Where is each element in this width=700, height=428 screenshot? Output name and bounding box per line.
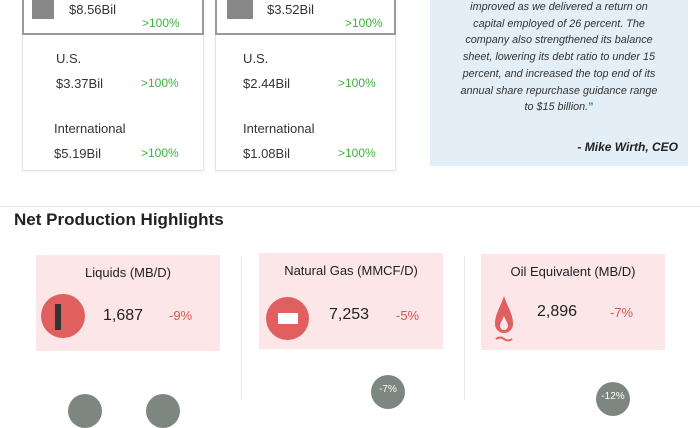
card header: downstream total [215, 0, 396, 35]
card header: upstream total: >100% [142, 16, 180, 30]
text: U.S. downstream: $2.44Bil [243, 76, 290, 91]
panel: natural gas: -5% [396, 308, 419, 323]
icon: flame drop [495, 296, 513, 342]
text: international downstream: International [243, 121, 315, 136]
text: U.S. upstream [56, 51, 179, 91]
text: international downstream: >100% [338, 146, 376, 160]
text: international upstream: International [54, 121, 126, 136]
quote text: to $15 billion.” [524, 101, 594, 113]
attribution: - Mike Wirth, CEO [577, 140, 678, 154]
badge: -7% [371, 375, 405, 409]
icon: pump jack [41, 294, 85, 338]
quote text [460, 1, 657, 113]
panel: liquids: -9% [169, 308, 192, 323]
card header: upstream total: $8.56Bil [69, 2, 116, 17]
text: international upstream: $5.19Bil [54, 146, 101, 161]
text: U.S. downstream: >100% [338, 76, 376, 90]
text: U.S. upstream: >100% [141, 76, 179, 90]
quote text: annual share repurchase guidance range [461, 85, 657, 97]
text: U.S. upstream: U.S. [56, 51, 81, 66]
panel: oil equivalent [481, 254, 665, 350]
text: U.S. upstream: $3.37Bil [56, 76, 103, 91]
quote text: sheet, lowering its debt ratio to under 15 [463, 51, 655, 63]
badge: -7%: -7% [379, 384, 397, 395]
text: international upstream: >100% [141, 146, 179, 160]
icon: refinery [227, 0, 253, 19]
panel: liquids: Liquids (MB/D) [85, 265, 171, 280]
panel: oil equivalent: -7% [610, 305, 633, 320]
panel: natural gas: 7,253 [329, 306, 369, 323]
icon: oil rig [32, 0, 54, 19]
badge: -12%: -12% [601, 391, 625, 402]
quote text: percent, and increased the top end of its [463, 68, 655, 80]
badge circles [68, 394, 180, 428]
text: U.S. downstream: U.S. [243, 51, 268, 66]
panel: natural gas: Natural Gas (MMCF/D) [284, 263, 418, 278]
card: upstream [22, 0, 204, 171]
quote box [430, 0, 688, 166]
card header: downstream total: $3.52Bil [267, 2, 314, 17]
quote text: improved as we delivered a return on [470, 1, 648, 13]
panel: liquids [36, 255, 220, 351]
quote text: capital employed of 26 percent. The [473, 18, 645, 30]
text: international upstream [54, 121, 179, 161]
panel: liquids: 1,687 [103, 307, 143, 324]
text: international downstream: $1.08Bil [243, 146, 290, 161]
card: downstream [215, 0, 396, 171]
panel: oil equivalent: Oil Equivalent (MB/D) [510, 264, 635, 279]
card header: upstream total [22, 0, 204, 35]
card header: downstream total: >100% [345, 16, 383, 30]
panel: oil equivalent: 2,896 [537, 303, 577, 320]
text: U.S. downstream [243, 51, 376, 91]
text: international downstream [243, 121, 376, 161]
quote text: company also strengthened its balance [465, 34, 653, 46]
heading: Net Production Highlights [14, 210, 224, 229]
panel: natural gas [259, 253, 443, 349]
badge: -12% [596, 382, 630, 416]
icon: oil can [266, 297, 309, 340]
